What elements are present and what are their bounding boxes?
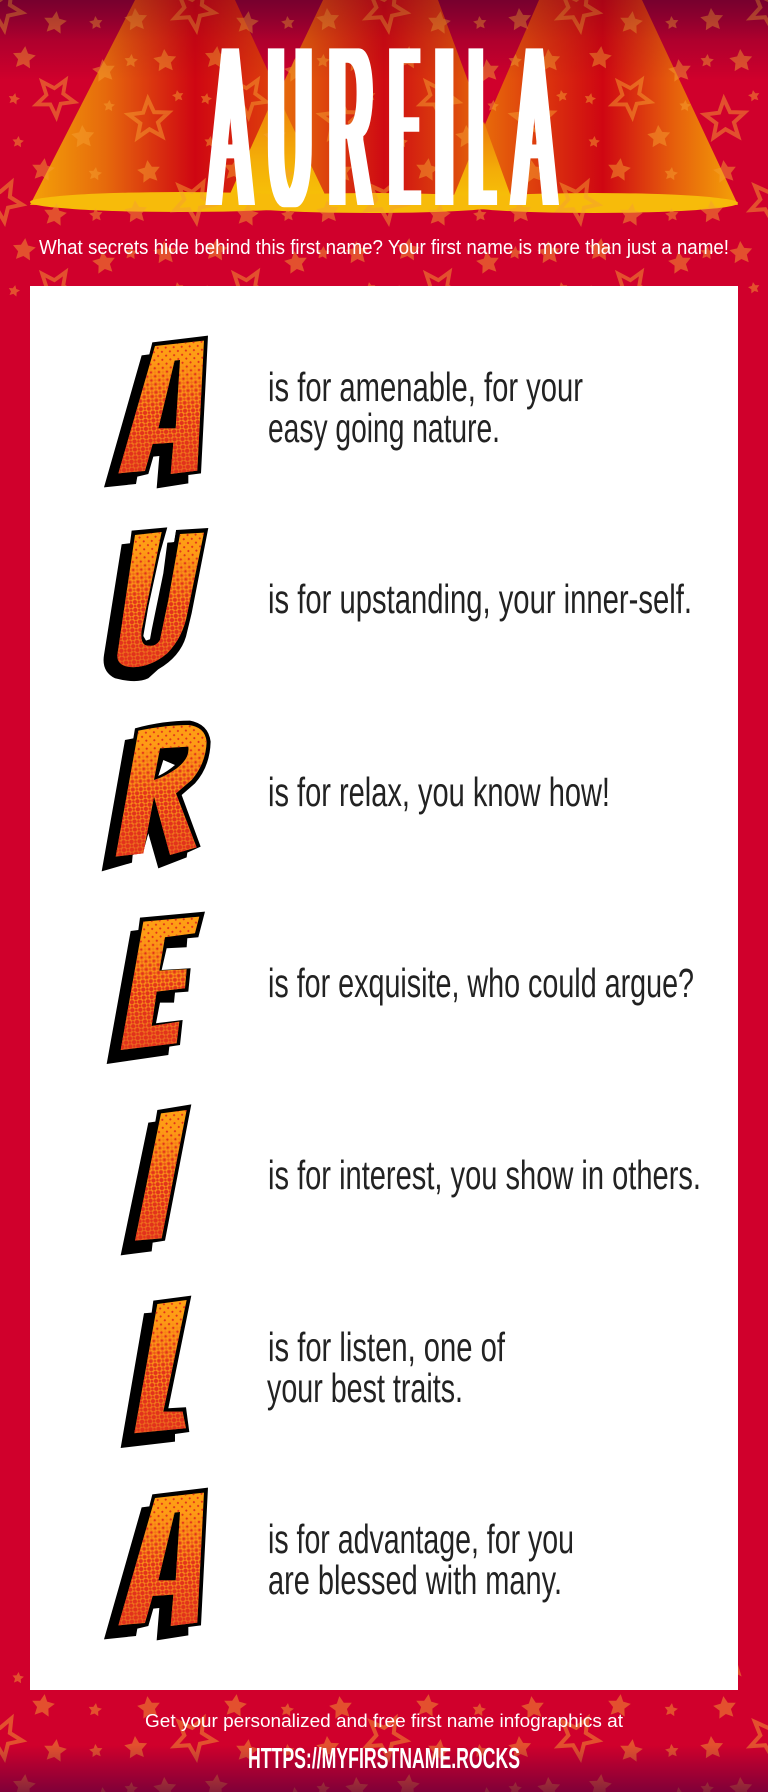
title: A: [210, 0, 250, 256]
spotlight cones: [30, 0, 738, 213]
subtitle: What secrets hide behind this first name? Your first name is more than just a name!: [39, 237, 729, 259]
letter L: [121, 1296, 191, 1448]
letter I: [121, 1104, 191, 1255]
top shade: [0, 0, 768, 80]
text: L: [267, 1324, 505, 1411]
title: L: [471, 0, 493, 257]
text: A: [268, 364, 583, 451]
title: R: [330, 0, 372, 256]
title: [210, 0, 554, 257]
letter U: [104, 527, 208, 681]
text: R: is for relax, you know how!: [268, 769, 610, 815]
footer line: Get your personalized and free first name infographics at: [145, 1711, 623, 1731]
top background shade: [0, 0, 768, 80]
bottom shade: [0, 1745, 768, 1792]
spotlight pools: [30, 192, 738, 213]
letter R: [102, 721, 211, 871]
text: L: is for listen, one of: [268, 1324, 505, 1370]
cone: left: [30, 0, 330, 205]
cone overlap: right: [450, 122, 514, 205]
title: I: [434, 0, 455, 256]
letter E: [107, 912, 205, 1064]
text: A (last): [268, 1516, 574, 1603]
letter A: [104, 336, 208, 488]
text: A: easy going nature.: [268, 405, 500, 451]
footer url: HTTPS://MYFIRSTNAME.ROCKS: [248, 1743, 520, 1775]
title: A: [514, 0, 554, 256]
cone: right: [450, 0, 738, 205]
text: A (last): is for advantage, for you: [268, 1516, 574, 1562]
cone: middle: [225, 0, 514, 205]
cone overlap: left: [225, 92, 330, 205]
title: U: [269, 0, 311, 256]
text: L: your best traits.: [267, 1365, 463, 1411]
panel: white content: [30, 286, 738, 1690]
text: A (last): are blessed with many.: [268, 1557, 562, 1603]
letter A (last): [104, 1488, 208, 1640]
text: A: is for amenable, for your: [268, 364, 583, 410]
title: E: [391, 0, 417, 257]
